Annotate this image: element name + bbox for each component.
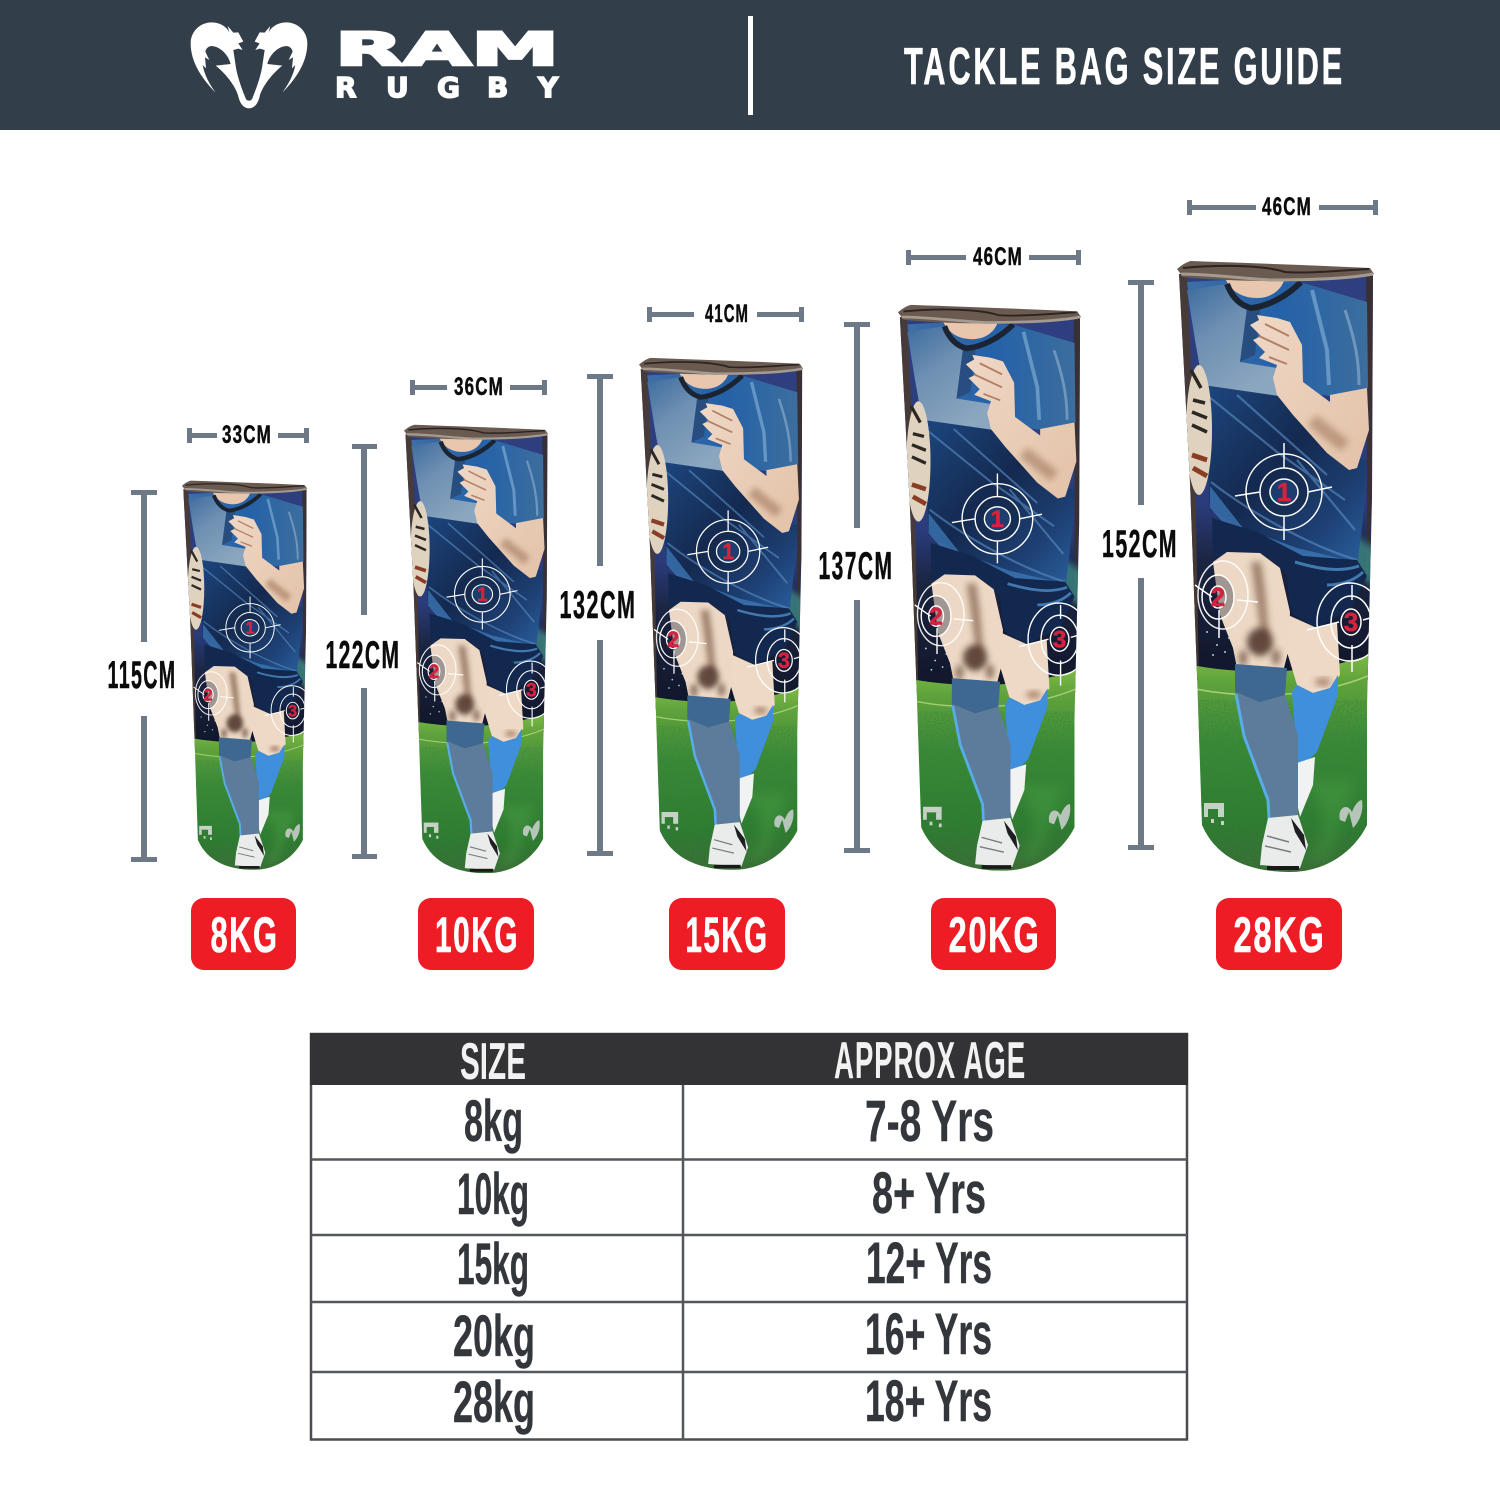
- wordmark: RAM: [335, 23, 559, 76]
- width marker: 46cm large: [1187, 193, 1378, 221]
- bag: 8kg: [182, 480, 313, 870]
- bag: 15kg: 1: [722, 539, 734, 564]
- bag: 15kg: 3: [778, 648, 790, 673]
- height marker: 132cm: 132CM: [560, 584, 636, 627]
- width marker: 41cm: [647, 300, 804, 328]
- row: 8kg: 7-8 Yrs: [865, 1089, 994, 1154]
- row: 10kg: 8+ Yrs: [872, 1161, 986, 1226]
- weight badge: 15kg: 15KG: [686, 907, 768, 963]
- width marker: 46cm large: 46CM: [1262, 193, 1312, 221]
- row: 8kg: 8kg: [464, 1089, 523, 1154]
- bag: 28kg: 3: [1344, 607, 1358, 637]
- width marker: 46cm small: [906, 243, 1081, 271]
- row: 20kg: 20kg: [453, 1304, 535, 1369]
- height marker: 137cm: 137CM: [818, 545, 894, 588]
- width marker: 41cm: 41CM: [705, 300, 749, 328]
- height marker: 152cm: 152CM: [1102, 523, 1178, 566]
- bag: 8kg: 3: [288, 701, 297, 720]
- width marker: 33cm: [187, 421, 309, 449]
- width marker: 46cm small: 46CM: [973, 243, 1023, 271]
- weight badge: 20kg: [931, 898, 1056, 970]
- width marker: 33cm: 33CM: [222, 421, 272, 449]
- bag: 28kg: 2: [1211, 582, 1225, 612]
- row: 20kg: [453, 1302, 992, 1369]
- row: 15kg: 15kg: [457, 1232, 529, 1297]
- weight badge: 20kg: 20KG: [948, 907, 1040, 963]
- row: 10kg: 10kg: [457, 1162, 529, 1227]
- header bar: [0, 0, 1500, 130]
- table header: approx age: APPROX AGE: [834, 1032, 1026, 1090]
- bag: 15kg: [639, 357, 811, 870]
- row: 8kg: [464, 1089, 994, 1154]
- bag: 10kg: [404, 424, 555, 873]
- height marker: 152cm: [1102, 280, 1178, 850]
- bag: 20kg: 2: [929, 603, 943, 630]
- bag: 28kg: 1: [1277, 477, 1291, 507]
- weight badge: 15kg: [669, 898, 785, 970]
- height marker: 122cm: 122CM: [326, 634, 400, 677]
- row: 15kg: 12+ Yrs: [866, 1231, 992, 1296]
- row: 28kg: 28kg: [453, 1370, 535, 1435]
- height marker: 137cm: [818, 322, 894, 853]
- weight badge: 28kg: [1216, 898, 1342, 970]
- bag: 20kg: 1: [991, 506, 1004, 533]
- weight badge: 8kg: 8KG: [210, 907, 278, 963]
- icon: ram head: [191, 22, 307, 108]
- bag: 20kg: [898, 304, 1089, 871]
- bag: 10kg: 3: [526, 680, 537, 701]
- bag: 8kg: 1: [245, 619, 255, 638]
- row: 15kg: [457, 1231, 992, 1297]
- weight badge: 10kg: [418, 898, 534, 970]
- weight badge: 8kg: [191, 898, 296, 970]
- bag: 28kg: [1177, 260, 1383, 872]
- height marker: 132cm: [560, 374, 636, 856]
- bag: 8kg: 2: [203, 685, 213, 704]
- height marker: 115cm: 115CM: [108, 654, 176, 697]
- table header: size: SIZE: [460, 1033, 526, 1091]
- height marker: 115cm: [108, 490, 176, 862]
- wordmark subline: RUGBY: [335, 71, 559, 104]
- bag: 20kg: 3: [1053, 627, 1066, 654]
- bag: 15kg: 2: [667, 627, 679, 652]
- size and age table: [310, 1032, 1188, 1440]
- weight badge: 10kg: 10KG: [435, 907, 519, 963]
- weight badge: 28kg: 28KG: [1234, 907, 1326, 963]
- width marker: 36cm: 36CM: [454, 373, 504, 401]
- row: 20kg: 16+ Yrs: [865, 1302, 992, 1367]
- row: 28kg: [453, 1369, 992, 1435]
- height marker: 122cm: [326, 444, 400, 859]
- bag: 10kg: 2: [429, 662, 439, 683]
- row: 10kg: [457, 1161, 986, 1227]
- row: 28kg: 18+ Yrs: [865, 1369, 992, 1434]
- header divider: [748, 16, 753, 115]
- width marker: 36cm: [410, 373, 547, 401]
- ram rugby logo: [191, 22, 559, 108]
- bag: 10kg: 1: [477, 585, 488, 606]
